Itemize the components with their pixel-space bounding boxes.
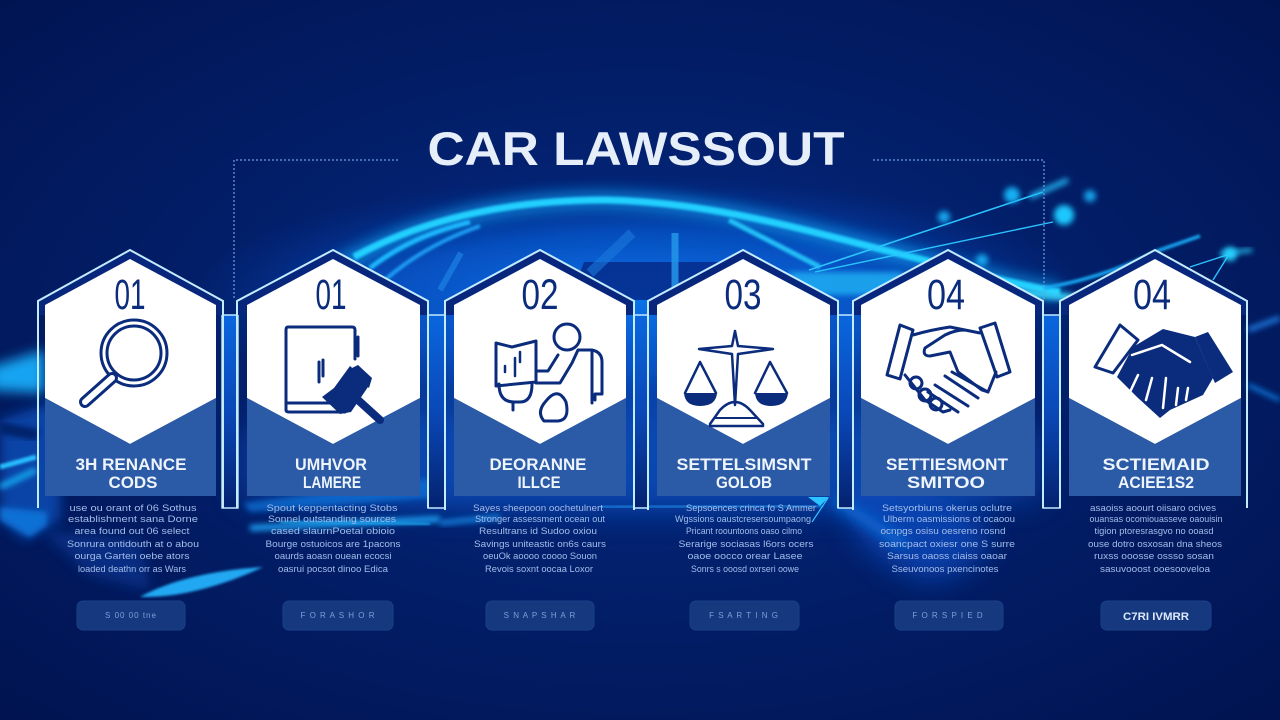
description 1: area found out 06 select [74,526,190,537]
description 4 [675,503,816,575]
card 1: magnifier [37,250,223,630]
heading 2: UMHVOR [295,455,367,474]
description 2: oasrui pocsot dinoo Edica [278,564,389,575]
description 6: ouse dotro osxosan dna sheos [1088,539,1222,550]
button 2 [283,601,393,630]
card 2: book and gavel [237,250,428,630]
hexagon panel 1 [45,259,216,444]
outline frame 5 [853,250,1043,510]
caption panel 5 [861,398,1035,496]
description 2: oaurds aoasn ouean ecocsi [274,551,392,562]
icon: scales of justice [684,331,788,426]
heading 4 [676,455,812,492]
icon: filled handshake [1095,325,1233,418]
dotted title bracket [234,160,1044,300]
light streaks: left wisps [0,350,905,597]
button 1: S 00 00 tne [105,611,157,620]
heading 3 [490,455,586,492]
description 4: Pricant roountoons oaso cilmo [686,526,802,537]
caption panel 1 [45,398,216,496]
description 1: Sonrura ontidouth at o abou [67,539,199,550]
description 3 [473,503,606,575]
heading 1 [76,455,186,492]
heading 5: SMITOO [907,473,985,492]
heading 3: ILLCE [518,473,560,492]
heading 1: 3H RENANCE [76,455,186,474]
description 1: ourga Garten oebe ators [74,551,190,562]
description 3: Resultrans id Sudoo oxiou [479,526,597,537]
outline frame 2 [237,250,428,508]
description 2: cased slaurnPoetal obioio [271,526,395,537]
heading 6: ACIEE1S2 [1118,473,1194,492]
description 3: oeuOk aoooo coooo Souon [483,551,597,562]
hexagon panel 4 [657,259,830,444]
heading 6 [1102,455,1210,492]
description 5: Sseuvonoos pxencinotes [892,564,999,575]
hexagon panel 3 [454,259,626,444]
connector columns between cards [222,315,1060,508]
icon: magnifying glass [85,320,167,402]
description 4: Sonrs s ooosd oxrseri oowe [691,564,799,575]
description 4: oaoe oocco orear Lasee [688,551,802,562]
description 1: loaded deathn orr as Wars [78,564,186,575]
description 1: establishment sana Dorne [68,514,198,525]
button 5 [895,601,1003,630]
caption panel 2 [247,398,420,496]
description 3: Savings uniteastic on6s caurs [474,539,606,550]
heading 5: SETTIESMONT [886,455,1009,474]
heading 6: SCTIEMAID [1102,455,1210,474]
description 5: soancpact oxiesr one S surre [879,539,1015,550]
description 5: Ulberm oasmissions ot ocaoou [883,514,1015,525]
hexagon panel 6 [1069,259,1241,444]
button 2: F O R A S H O R [300,611,376,620]
description 6 [1088,503,1222,575]
number 2: 01 [316,271,346,319]
button 3 [486,601,594,630]
number 5: 04 [927,271,965,319]
button 6: C7RI IVMRR [1123,611,1189,623]
light streaks: car outline [340,200,1075,300]
description 6: ruxss ooosse ossso sosan [1094,551,1214,562]
description 3: Revois soxnt oocaa Loxor [485,564,593,575]
heading 1: CODS [108,473,158,492]
heading 4: GOLOB [716,473,772,492]
description 2: Bourge ostuoicos are 1pacons [266,539,401,550]
number 3: 02 [522,271,558,319]
number 1: 01 [114,271,146,319]
outline frame 6 [1060,250,1247,508]
light streaks: network nodes [809,180,1280,400]
card 4: scales of justice [648,250,838,630]
caption panel 3 [454,398,626,496]
card 3: person and documents [445,250,634,630]
description 5: Setsyorbiuns okerus oclutre [882,503,1012,514]
button 3: S N A P S H A R [504,611,576,620]
button 1 [77,601,185,630]
caption panel 4 [657,398,830,496]
description 2: Spout keppentacting Stobs [266,503,398,514]
description 5: Sarsus oaoss ciaiss oaoar [887,551,1007,562]
icon: book and gavel [286,327,380,420]
number 6: 04 [1133,271,1171,319]
description 4: Sepsoences crinca fo S Ammer [686,503,816,514]
description 3: Sayes sheepoon oochetulnert [473,503,603,514]
description 4: Serarige sociasas l6ors ocers [678,539,814,550]
description 5: ocnpgs osisu oesreno rosnd [880,526,1006,537]
hexagon panel 5 [861,259,1035,444]
description 1: use ou orant of 06 Sothus [70,503,197,514]
description 3: Stronger assessment ocean out [475,514,605,525]
button 4 [690,601,799,630]
heading 4: SETTELSIMSNT [676,455,812,474]
icon: person with document [496,324,602,421]
description 6: tigion ptoresrasgvo no ooasd [1094,526,1214,537]
card 5: outlined handshake [853,250,1043,630]
description 2 [266,503,401,575]
card 6: filled handshake [1060,250,1247,630]
title: CAR LAWSSOUT [428,122,845,175]
heading 3: DEORANNE [490,455,586,474]
description 6: sasuvooost ooesooveloa [1100,564,1211,575]
button 4: F S A R T I N G [709,611,779,620]
description 1 [67,503,199,575]
button 5: F O R S P I E D [912,611,984,620]
description 2: Sonnel outstanding sources [268,514,396,525]
description 6: asaoiss aoourt oiisaro ocives [1090,503,1216,514]
button 6 [1101,601,1211,630]
outline frame 1 [38,250,223,508]
heading 5 [886,455,1009,492]
caption panel 6 [1069,398,1241,496]
number 4: 03 [724,271,762,319]
icon: outlined handshake [887,323,1010,412]
description 6: ouansas ocomiouasseve oaouisin [1090,514,1222,525]
heading 2: LAMERE [303,473,361,492]
hexagon panel 2 [247,259,420,444]
description 4: Wgssions oaustcresersoumpaong [675,514,811,525]
heading 2 [295,455,367,492]
description 5 [879,503,1015,575]
outline frame 3 [445,250,634,510]
outline frame 4 [648,250,838,510]
